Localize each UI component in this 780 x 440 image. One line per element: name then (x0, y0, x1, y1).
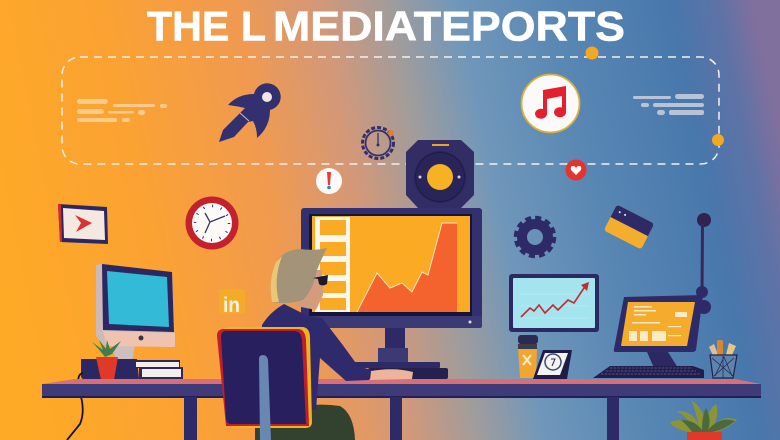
floor plant (670, 400, 737, 440)
icon: alert badge (316, 168, 342, 194)
books and base (81, 359, 183, 379)
title: THE L (147, 3, 266, 50)
sidebar list (315, 217, 350, 312)
linkedin badge (219, 289, 245, 317)
hand (370, 369, 413, 380)
pencil holder (709, 340, 737, 378)
person (255, 248, 413, 440)
coffee cup (518, 335, 538, 378)
main monitor (301, 208, 482, 379)
area chart (357, 223, 457, 312)
torso and arm (262, 304, 371, 410)
icon: wall clock (186, 196, 238, 250)
cable (67, 373, 83, 440)
right placeholder lines (633, 94, 704, 115)
legs (255, 405, 355, 440)
linkedin badge: in (223, 294, 240, 317)
icon: heart badge (566, 160, 586, 180)
glasses (313, 275, 328, 286)
title (147, 3, 625, 50)
desk lamp pole (696, 213, 711, 314)
hair (271, 248, 327, 303)
icon: camera speaker (406, 140, 474, 208)
desk (42, 379, 761, 440)
plant in red pot (92, 340, 121, 380)
face (296, 270, 323, 310)
office chair (217, 327, 312, 440)
right laptop monitor (614, 295, 703, 368)
title: MEDIATEPORTS (273, 3, 625, 50)
left computer (96, 264, 175, 362)
keyboard (593, 366, 704, 378)
dashed panel (62, 46, 724, 164)
icon: framed play card (58, 204, 108, 244)
icon: timer gear (362, 128, 394, 158)
left placeholder lines (77, 99, 167, 122)
small tablet clock (533, 350, 572, 379)
icon: payment card (604, 205, 654, 249)
icon: gear (516, 218, 554, 256)
tablet chart (509, 274, 599, 332)
icon: music note badge (522, 74, 580, 132)
icon: rocket pen (219, 83, 281, 142)
